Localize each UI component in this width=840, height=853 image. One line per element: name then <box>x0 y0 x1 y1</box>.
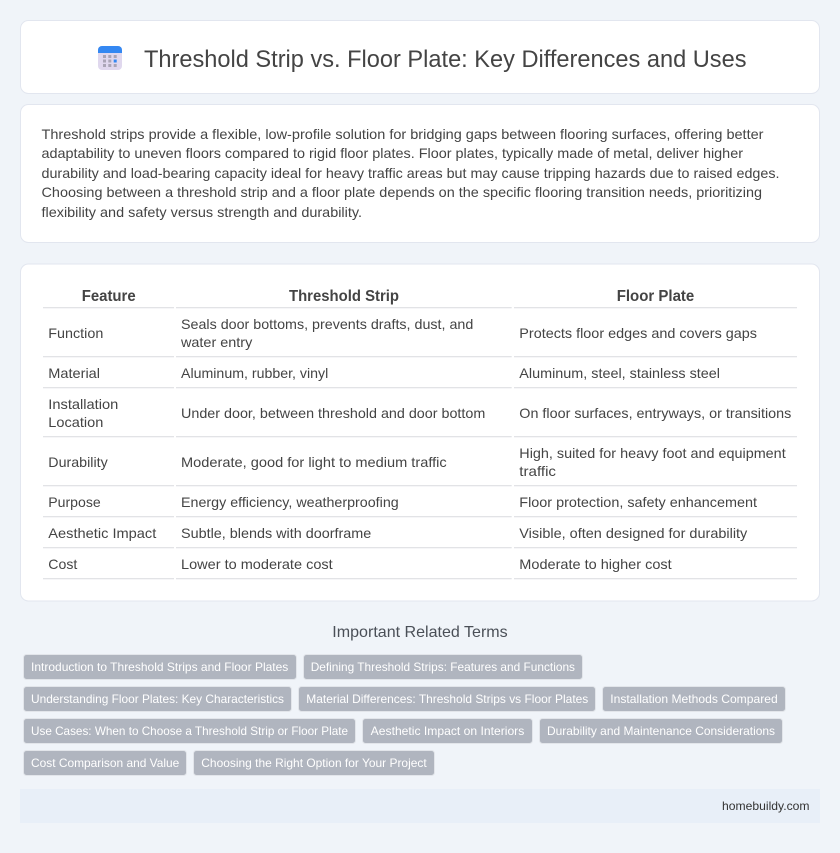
row: installation location: Under door, between threshold and door bottom <box>181 405 485 421</box>
row: function: Seals door bottoms, prevents drafts, dust, and <box>181 316 473 332</box>
panel: related term tags: Understanding Floor Plates: Key Characteristics <box>31 692 284 706</box>
row: durability: Moderate, good for light to medium traffic <box>181 454 447 470</box>
panel: related term tags: Material Differences: Threshold Strips vs Floor Plates <box>306 692 588 706</box>
table header row: Feature <box>82 288 136 305</box>
panel: introduction paragraph: Threshold strips provide a flexible, low-profile solution for bridging gaps between flooring surfaces, offering better <box>42 126 764 142</box>
panel: introduction paragraph: flexibility and safety versus strength and durability. <box>42 204 362 220</box>
row: installation location: On floor surfaces, entryways, or transitions <box>519 405 791 421</box>
row: durability: High, suited for heavy foot and equipment <box>519 445 786 461</box>
row: purpose <box>43 494 797 517</box>
panel: header <box>20 20 820 94</box>
panel: related term tags: Cost Comparison and Value <box>31 756 180 770</box>
panel: introduction paragraph <box>20 104 820 242</box>
panel: related term tags: Use Cases: When to Choose a Threshold Strip or Floor Plate <box>31 724 348 738</box>
panel: related term tags: Installation Methods Compared <box>610 692 778 706</box>
row: cost: Moderate to higher cost <box>519 556 672 572</box>
row: installation location: Location <box>48 414 103 430</box>
row: durability <box>43 445 797 486</box>
row: durability: Durability <box>48 454 108 470</box>
panel: introduction paragraph: durability and load-bearing capacity ideal for heavy traffic areas but may cause tripping hazards due to raised edges. <box>42 165 780 181</box>
panel: related term tags <box>24 654 786 776</box>
panel: introduction paragraph: Choosing between a threshold strip and a floor plate depends on the specific flooring transition needs, prioritizing <box>42 184 762 200</box>
row: purpose: Purpose <box>48 494 101 510</box>
row: cost: Lower to moderate cost <box>181 556 333 572</box>
row: aesthetic impact: Visible, often designed for durability <box>519 525 747 541</box>
footer <box>20 789 820 823</box>
panel: comparison table <box>20 264 820 601</box>
row: material: Material <box>48 365 100 381</box>
panel: related term tags: Durability and Maintenance Considerations <box>547 724 775 738</box>
row: durability: traffic <box>519 463 556 479</box>
title: Threshold Strip vs. Floor Plate: Key Differences and Uses <box>144 46 746 73</box>
table header row: Floor Plate <box>617 288 695 305</box>
row: material <box>43 365 797 388</box>
panel: related term tags: Aesthetic Impact on Interiors <box>371 724 524 738</box>
panel: related term tags: Introduction to Threshold Strips and Floor Plates <box>31 660 288 674</box>
row: function: Function <box>48 325 103 341</box>
row: aesthetic impact: Aesthetic Impact <box>48 525 156 541</box>
panel: introduction paragraph: adaptability to uneven floors compared to rigid floor plates. Floor plates, typically made of metal, deliver higher <box>42 145 743 161</box>
row: function: Protects floor edges and covers gaps <box>519 325 757 341</box>
row: function: water entry <box>180 334 252 350</box>
row: installation location: Installation <box>48 396 118 412</box>
row: aesthetic impact <box>43 525 797 548</box>
heading: important related terms: Important Related Terms <box>332 624 508 641</box>
table header row: Threshold Strip <box>289 288 399 305</box>
row: purpose: Energy efficiency, weatherproofing <box>181 494 399 510</box>
panel: related term tags: Choosing the Right Option for Your Project <box>201 756 427 770</box>
icon: calendar grid <box>98 46 122 70</box>
row: installation location <box>43 396 797 437</box>
footer: homebuildy.com <box>722 799 810 813</box>
row: material: Aluminum, rubber, vinyl <box>181 365 328 381</box>
row: material: Aluminum, steel, stainless steel <box>519 365 720 381</box>
row: function <box>43 316 797 357</box>
row: cost: Cost <box>48 556 77 572</box>
table header row <box>43 288 797 308</box>
row: cost <box>43 556 797 579</box>
row: purpose: Floor protection, safety enhancement <box>519 494 757 510</box>
row: aesthetic impact: Subtle, blends with doorframe <box>181 525 372 541</box>
panel: related term tags: Defining Threshold Strips: Features and Functions <box>311 660 575 674</box>
